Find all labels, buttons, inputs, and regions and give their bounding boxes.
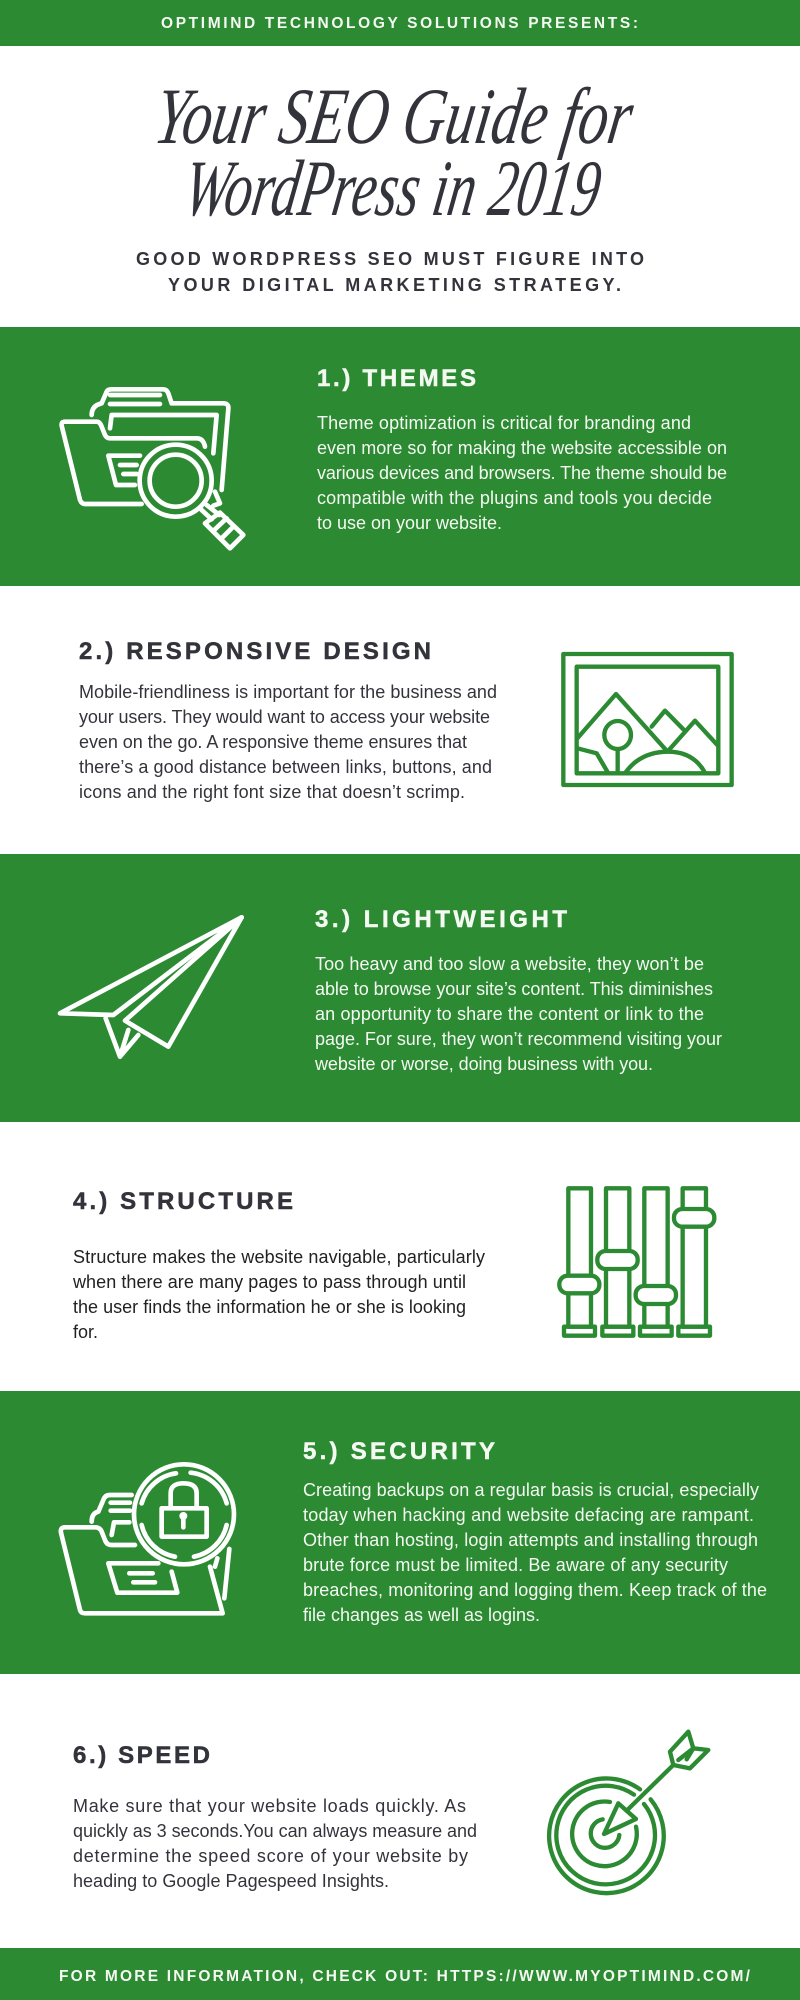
footer banner — [0, 1948, 800, 2000]
panel: 4 structure — [72, 1188, 714, 1342]
text block: security — [303, 1480, 767, 1625]
text block: responsive design — [79, 682, 497, 802]
panel: 1 themes — [0, 327, 800, 586]
text block: speed — [73, 1796, 477, 1891]
icon: framed landscape — [563, 654, 732, 785]
text block: themes: various devices and browsers. The theme should be — [317, 463, 727, 483]
icon: paper plane — [60, 917, 242, 1057]
text block: responsive design: Mobile-friendliness is important for the business and — [79, 682, 497, 702]
text block: structure: Structure makes the website navigable, particularly — [73, 1247, 485, 1267]
footer banner: FOR MORE INFORMATION, CHECK OUT: HTTPS://WWW.MYOPTIMIND.COM/ — [59, 1968, 751, 1985]
icon: target with arrow — [549, 1732, 708, 1893]
text block: security: Other than hosting, login attempts and installing through — [303, 1530, 758, 1550]
title: Your SEO Guide for — [149, 72, 640, 161]
text block: lightweight: Too heavy and too slow a website, they won’t be — [315, 954, 704, 974]
text block: structure — [72, 1247, 485, 1342]
text block: themes: Theme optimization is critical for branding and — [317, 413, 691, 433]
text block: security: file changes as well as logins. — [303, 1605, 540, 1625]
text block: lightweight: website or worse, doing business with you. — [314, 1054, 653, 1074]
text block: lightweight: page. For sure, they won’t recommend visiting your — [315, 1029, 722, 1049]
top banner: OPTIMIND TECHNOLOGY SOLUTIONS PRESENTS: — [161, 15, 638, 32]
text block: responsive design: there’s a good distance between links, buttons, and — [79, 757, 492, 777]
text block: themes: to use on your website. — [317, 513, 502, 533]
text block: structure: when there are many pages to pass through until — [72, 1272, 466, 1292]
subtitle: GOOD WORDPRESS SEO MUST FIGURE INTO — [136, 249, 644, 269]
text block: themes: compatible with the plugins and tools you decide — [317, 488, 712, 508]
text block: speed: heading to Google Pagespeed Insights. — [73, 1871, 389, 1891]
top banner — [0, 0, 800, 46]
panel: 5 security — [0, 1391, 800, 1674]
text block: lightweight: an opportunity to share the content or link to the — [315, 1004, 704, 1024]
text block: lightweight — [314, 954, 722, 1074]
text block: structure: for. — [73, 1322, 98, 1342]
panel: 3 lightweight — [0, 854, 800, 1122]
heading: speed: 6.) SPEED — [73, 1742, 210, 1769]
text block: speed: determine the speed score of your website by — [73, 1846, 468, 1866]
title: WordPress in 2019 — [178, 144, 607, 233]
subtitle — [136, 249, 644, 295]
text block: lightweight: able to browse your site’s content. This diminishes — [315, 979, 713, 999]
text block: themes: even more so for making the website accessible on — [317, 438, 727, 458]
text block: structure: the user finds the information he or she is looking — [73, 1297, 466, 1317]
panel: 6 speed — [73, 1732, 708, 1893]
text block: security: breaches, monitoring and logging them. Keep track of the — [303, 1580, 767, 1600]
text block: responsive design: icons and the right font size that doesn’t scrimp. — [79, 782, 465, 802]
text block: responsive design: your users. They would want to access your website — [79, 707, 490, 727]
text block: speed: quickly as 3 seconds.You can always measure and — [73, 1821, 477, 1841]
heading: themes: 1.) THEMES — [317, 365, 476, 392]
text block: responsive design: even on the go. A responsive theme ensures that — [79, 732, 467, 752]
icon: folder with magnifier — [62, 389, 243, 548]
heading: lightweight: 3.) LIGHTWEIGHT — [315, 906, 567, 933]
text block: security: today when hacking and website defacing are rampant. — [303, 1505, 754, 1525]
text block: security: Creating backups on a regular basis is crucial, especially — [303, 1480, 759, 1500]
subtitle: YOUR DIGITAL MARKETING STRATEGY. — [168, 275, 621, 295]
text block: speed: Make sure that your website loads quickly. As — [73, 1796, 466, 1816]
heading: structure: 4.) STRUCTURE — [73, 1188, 293, 1215]
icon: sliders — [559, 1188, 714, 1336]
text block: security: brute force must be limited. Be aware of any security — [303, 1555, 728, 1575]
title — [149, 72, 640, 233]
text block: themes — [317, 413, 727, 533]
heading: security: 5.) SECURITY — [303, 1438, 495, 1465]
panel: 2 responsive design — [79, 638, 732, 802]
icon: folder with padlock — [61, 1464, 234, 1613]
heading: responsive design: 2.) RESPONSIVE DESIGN — [79, 638, 431, 665]
